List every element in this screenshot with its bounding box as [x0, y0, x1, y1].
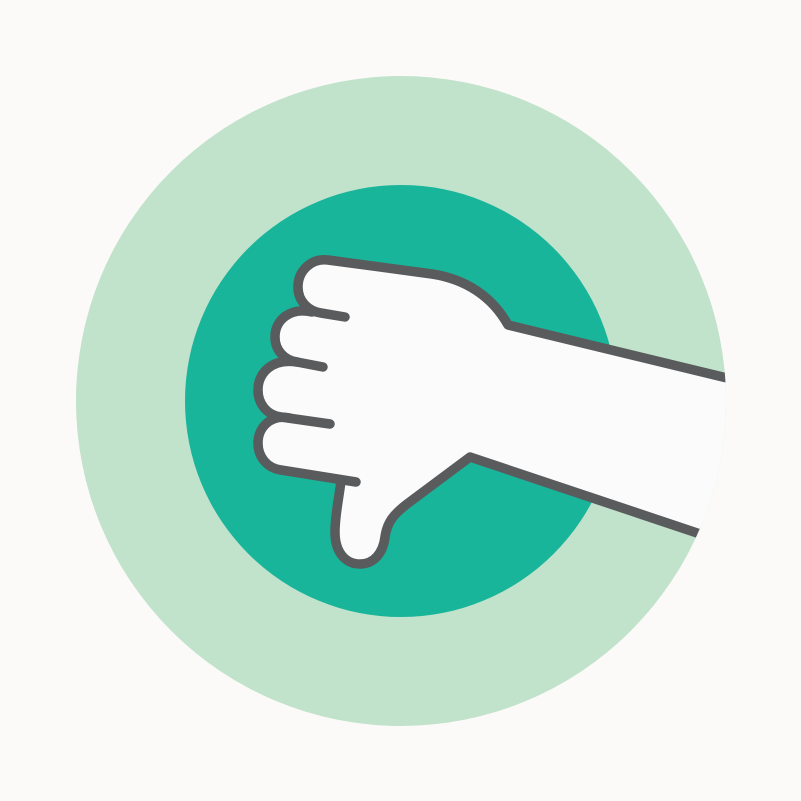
outer pale green circle	[76, 76, 726, 726]
hand outline: upper arm and first finger	[298, 260, 760, 386]
icon: thumbs-down hand	[258, 260, 760, 564]
thumbs-down illustration	[76, 76, 726, 726]
hand outline: second finger	[275, 311, 323, 367]
hand outline: thumb and lower arm	[335, 457, 760, 564]
hand outline: third finger	[258, 361, 330, 424]
hand outline: fourth finger	[258, 417, 356, 482]
inner teal circle	[185, 185, 617, 617]
hand fill	[262, 264, 726, 560]
